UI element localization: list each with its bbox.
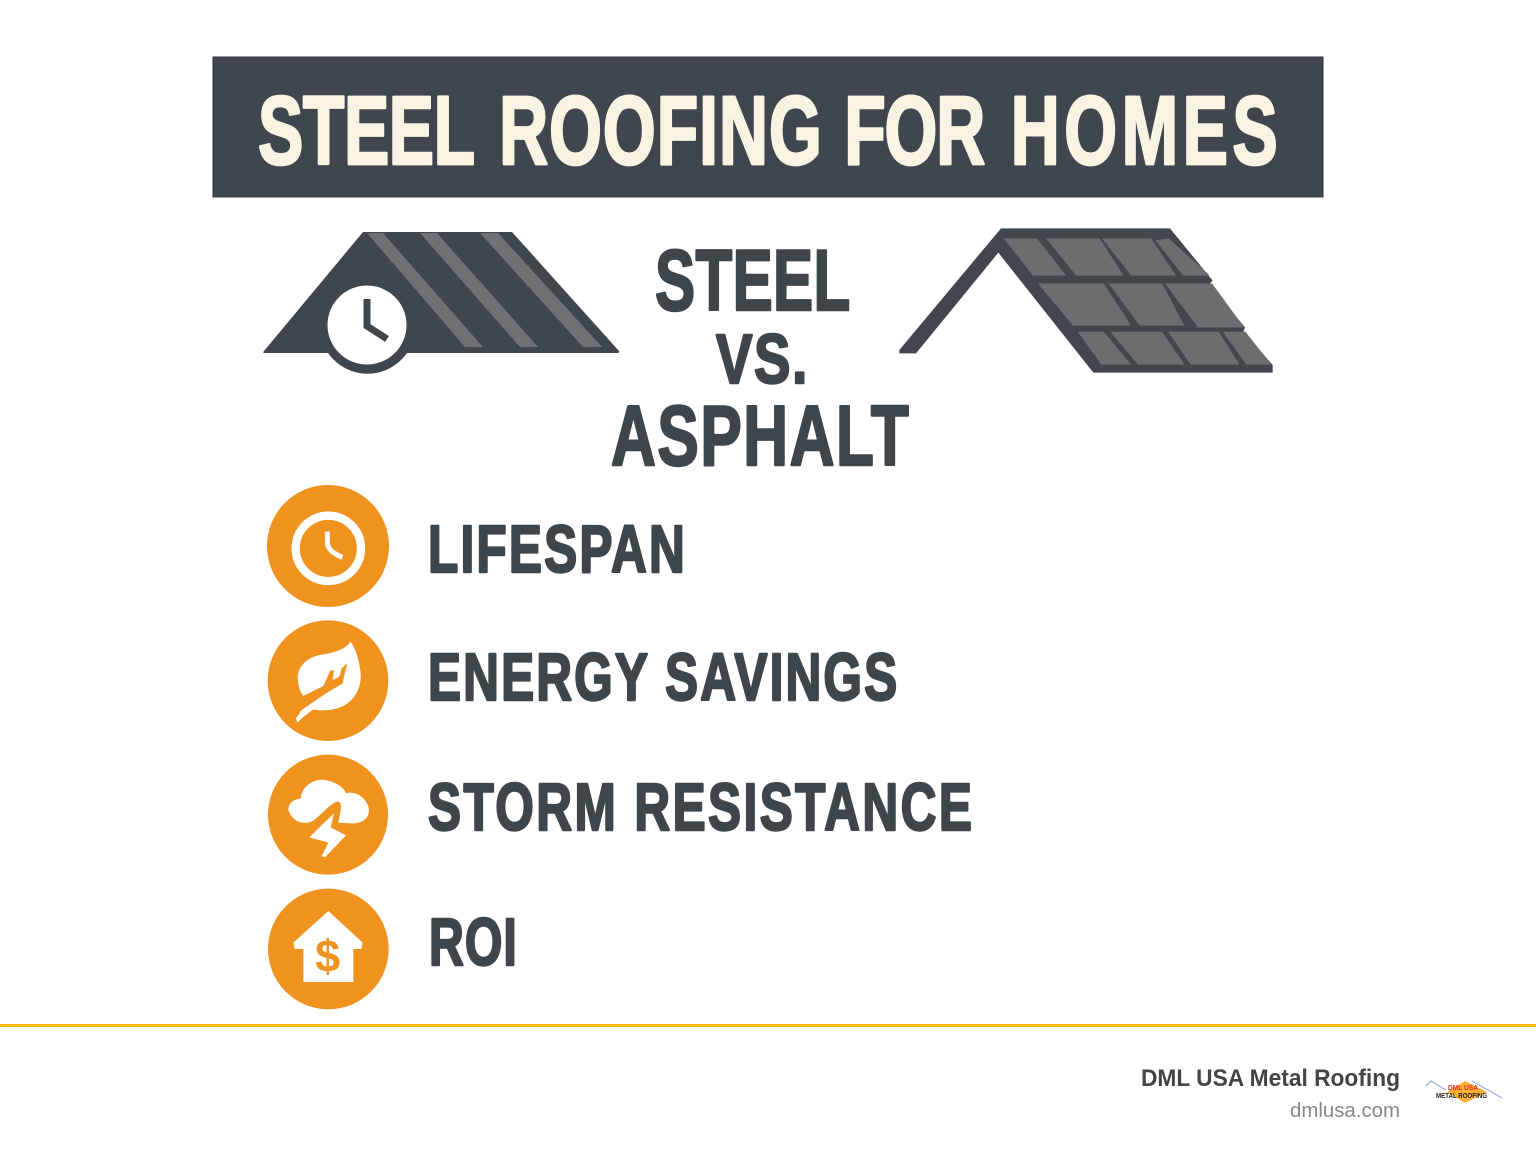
icon: company logo xyxy=(1426,1081,1502,1103)
icon: storm cloud xyxy=(268,755,388,875)
label: storm resistance: STORM RESISTANCE xyxy=(428,771,972,845)
label: roi: ROI xyxy=(429,905,517,980)
item: roi xyxy=(268,889,517,1009)
label: energy savings: ENERGY SAVINGS xyxy=(428,641,897,715)
item: storm resistance xyxy=(268,755,972,875)
item: lifespan xyxy=(267,485,685,607)
clock xyxy=(328,286,407,374)
footer brand xyxy=(1141,1065,1400,1122)
title text: STEEL xyxy=(258,76,475,185)
icon: house with dollar xyxy=(268,889,389,1009)
heading: steel vs. asphalt xyxy=(611,232,909,483)
title text: ROOFING xyxy=(499,76,823,185)
icon: company logo: DML USA xyxy=(1448,1085,1478,1092)
title text: FOR xyxy=(844,76,984,185)
icon: clock xyxy=(267,485,389,607)
heading: steel vs. asphalt: VS. xyxy=(716,321,807,399)
shingles xyxy=(1005,239,1270,364)
heading: steel vs. asphalt: STEEL xyxy=(655,232,850,329)
steel roof stripes xyxy=(367,233,602,347)
title banner xyxy=(213,57,1323,197)
heading: steel vs. asphalt: ASPHALT xyxy=(611,388,909,483)
footer brand: DML USA Metal Roofing xyxy=(1141,1065,1400,1092)
footer brand: dmlusa.com xyxy=(1290,1100,1400,1122)
footer divider xyxy=(0,1024,1536,1027)
label: lifespan: LIFESPAN xyxy=(428,513,685,587)
icon: leaf xyxy=(268,620,388,741)
icon: house with dollar: $ xyxy=(315,931,340,982)
item: energy savings xyxy=(268,620,897,741)
icon: company logo: METAL ROOFING xyxy=(1436,1093,1487,1100)
title text: HOMES xyxy=(1011,76,1282,185)
icon: asphalt shingle roof xyxy=(899,228,1273,373)
icon: steel roof with clock xyxy=(263,232,619,374)
